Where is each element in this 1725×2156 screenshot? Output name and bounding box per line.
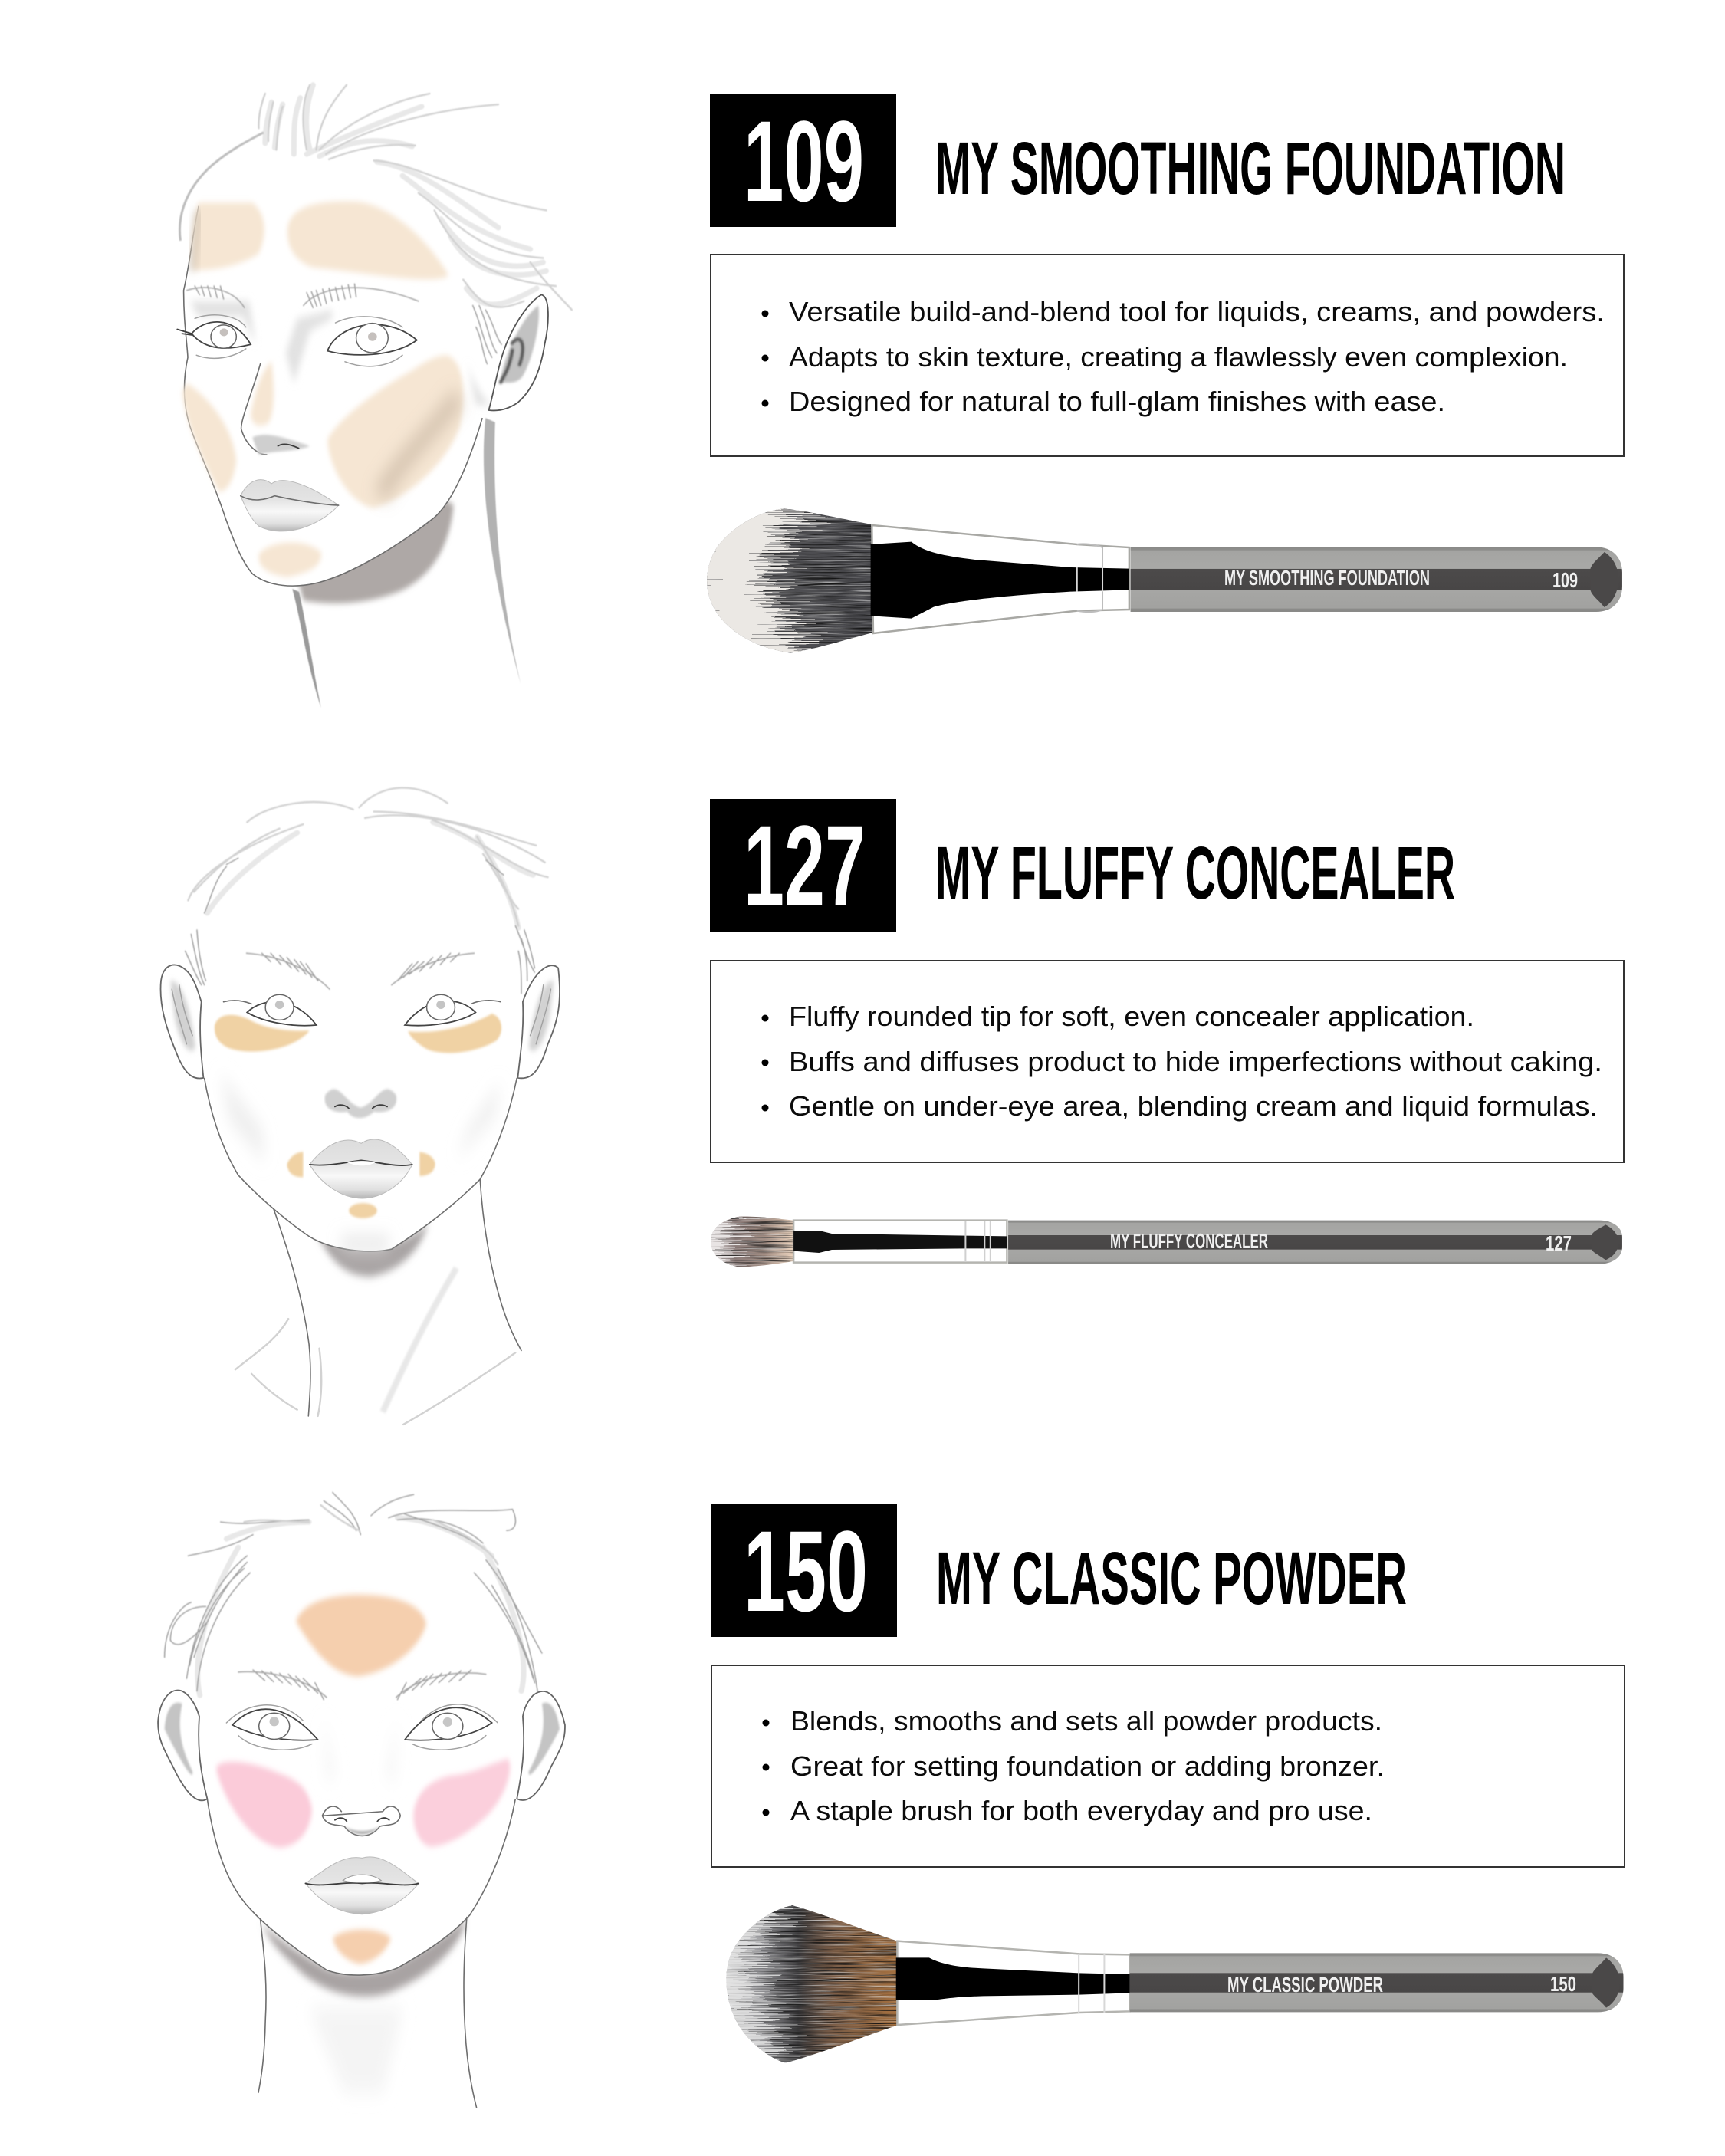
number badge xyxy=(711,1504,897,1637)
brows xyxy=(247,953,474,989)
lips xyxy=(305,1857,419,1914)
chin shadow xyxy=(262,1919,465,1997)
face chart: 150 powder and blush placement xyxy=(158,1493,565,2108)
facial shading xyxy=(309,1717,403,2092)
title: MY CLASSIC POWDER xyxy=(936,1536,1407,1620)
brows xyxy=(187,284,419,307)
benefits panel: 109: Versatile build-and-blend tool for liquids, creams, and powders. xyxy=(789,296,1605,327)
makeup zones xyxy=(182,202,463,577)
benefits panel: 150: Blends, smooths and sets all powder products. xyxy=(790,1705,1382,1737)
makeup zones xyxy=(216,1595,510,1964)
ears xyxy=(160,965,560,1079)
eyes xyxy=(226,1704,498,1750)
benefits panel: 127: Fluffy rounded tip for soft, even concealer application. xyxy=(789,1001,1474,1032)
neck xyxy=(292,418,521,708)
brush: 109 xyxy=(707,508,1622,653)
makeup zones xyxy=(215,1014,501,1218)
benefits panel: 127: Gentle on under-eye area, blending cream and liquid formulas. xyxy=(789,1090,1598,1122)
brush: 150: MY CLASSIC POWDER xyxy=(1227,1973,1383,1997)
eyes xyxy=(177,315,417,366)
brush: 150 xyxy=(703,1896,1624,2065)
face chart: 109 foundation placement xyxy=(177,85,572,708)
facial shading xyxy=(221,1073,501,1249)
number badge: 150 xyxy=(744,1507,868,1635)
face outline xyxy=(207,1799,515,1975)
hair strands xyxy=(165,1493,542,1695)
brush: 109: 109 xyxy=(1552,568,1578,592)
chin shadow xyxy=(315,1224,429,1277)
brush: 150: 150 xyxy=(1550,1972,1576,1996)
ears xyxy=(158,1691,565,1800)
brush: 127: MY FLUFFY CONCEALER xyxy=(1110,1229,1268,1253)
heading: 127 xyxy=(710,799,1455,932)
nose xyxy=(322,1806,400,1836)
brush: 127: 127 xyxy=(1546,1231,1572,1255)
eye and nose shading xyxy=(190,301,492,405)
benefits panel: 127: Buffs and diffuses product to hide imperfections without caking. xyxy=(789,1046,1602,1077)
hair strands xyxy=(186,788,548,994)
nose xyxy=(325,1089,396,1118)
benefits panel: 150 xyxy=(711,1665,1625,1867)
neck xyxy=(258,1918,477,2108)
benefits panel: 109 xyxy=(711,255,1624,456)
brows xyxy=(238,1670,486,1700)
lips xyxy=(241,480,339,531)
eyes xyxy=(224,994,501,1026)
benefits panel: 109: Adapts to skin texture, creating a flawlessly even complexion. xyxy=(789,341,1568,373)
number badge: 109 xyxy=(744,97,864,225)
number badge: 127 xyxy=(744,801,866,930)
ear xyxy=(489,294,548,410)
neck and collarbones xyxy=(235,1179,521,1425)
brush: 127 xyxy=(711,1216,1622,1267)
face chart: 127 concealer placement xyxy=(160,788,560,1425)
brush: 109: MY SMOOTHING FOUNDATION xyxy=(1224,566,1430,590)
chin shadow xyxy=(294,496,454,603)
heading: 109 xyxy=(710,94,1566,227)
face outline xyxy=(205,1078,517,1251)
benefits panel: 150: A staple brush for both everyday and pro use. xyxy=(790,1795,1372,1826)
face outline xyxy=(184,206,482,586)
number badge xyxy=(710,94,896,227)
benefits panel: 127 xyxy=(711,961,1624,1162)
nose xyxy=(242,364,310,455)
heading: 150 xyxy=(711,1504,1407,1637)
number badge xyxy=(710,799,896,932)
benefits panel: 150: Great for setting foundation or adding bronzer. xyxy=(790,1750,1385,1782)
benefits panel: 109: Designed for natural to full-glam finishes with ease. xyxy=(789,386,1445,417)
lips xyxy=(310,1139,412,1198)
hair strands xyxy=(179,85,572,364)
